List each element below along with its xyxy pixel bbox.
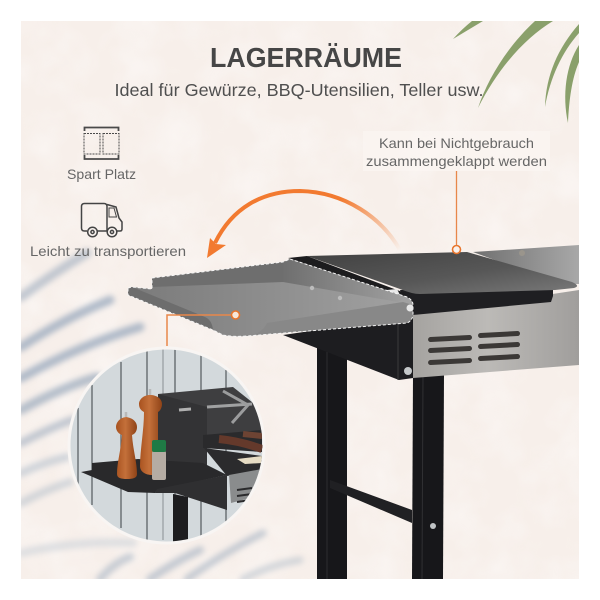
folded lid: [307, 252, 577, 294]
grill side panel: [158, 394, 207, 465]
table: [81, 459, 227, 493]
connector: tray to inset: [167, 311, 240, 346]
under lid dark: [400, 290, 553, 315]
inset photo: side table with pepper mills: [68, 345, 266, 545]
label: Spart Platz: Spart Platz: [67, 166, 136, 182]
lid shadow wedge: [288, 256, 408, 298]
dark side bracket: [283, 314, 413, 380]
unfolded tray (dashed outline): [128, 259, 414, 336]
dashed outline: [128, 259, 413, 336]
callout: foldable: zusammengeklappt werden: [366, 153, 547, 169]
callout dot: lid: [452, 246, 460, 254]
orange fold arrow: [207, 191, 400, 258]
crossbar: [330, 480, 412, 523]
front left lip: [128, 287, 213, 330]
icon: space saving: [84, 128, 119, 159]
callout: foldable: Kann bei Nichtgebrauch: [379, 135, 534, 151]
grill grate and meat: [203, 430, 262, 452]
subtitle: Ideal für Gewürze, BBQ-Utensilien, Teller usw.: [114, 80, 484, 100]
label: Leicht zu transportieren: Leicht zu transportieren: [30, 243, 186, 259]
right wall: [283, 259, 407, 302]
icon: delivery van: [82, 204, 122, 237]
steel front: [413, 290, 579, 378]
front right lip: [247, 302, 413, 336]
tall pepper mill: [139, 395, 162, 475]
bolts: [310, 286, 314, 290]
title: LAGERRÄUME: [210, 42, 402, 73]
vents: [428, 331, 520, 365]
back wall: [152, 262, 283, 287]
small pepper mill: [116, 417, 137, 479]
palm leaves: [453, 21, 579, 123]
grill body: [283, 245, 579, 579]
wall planks: [78, 345, 226, 540]
legs: [317, 340, 347, 579]
spice jar: [152, 451, 166, 480]
callout: foldable: [363, 131, 550, 245]
back panel: [473, 245, 579, 284]
grill interior: [158, 387, 262, 435]
